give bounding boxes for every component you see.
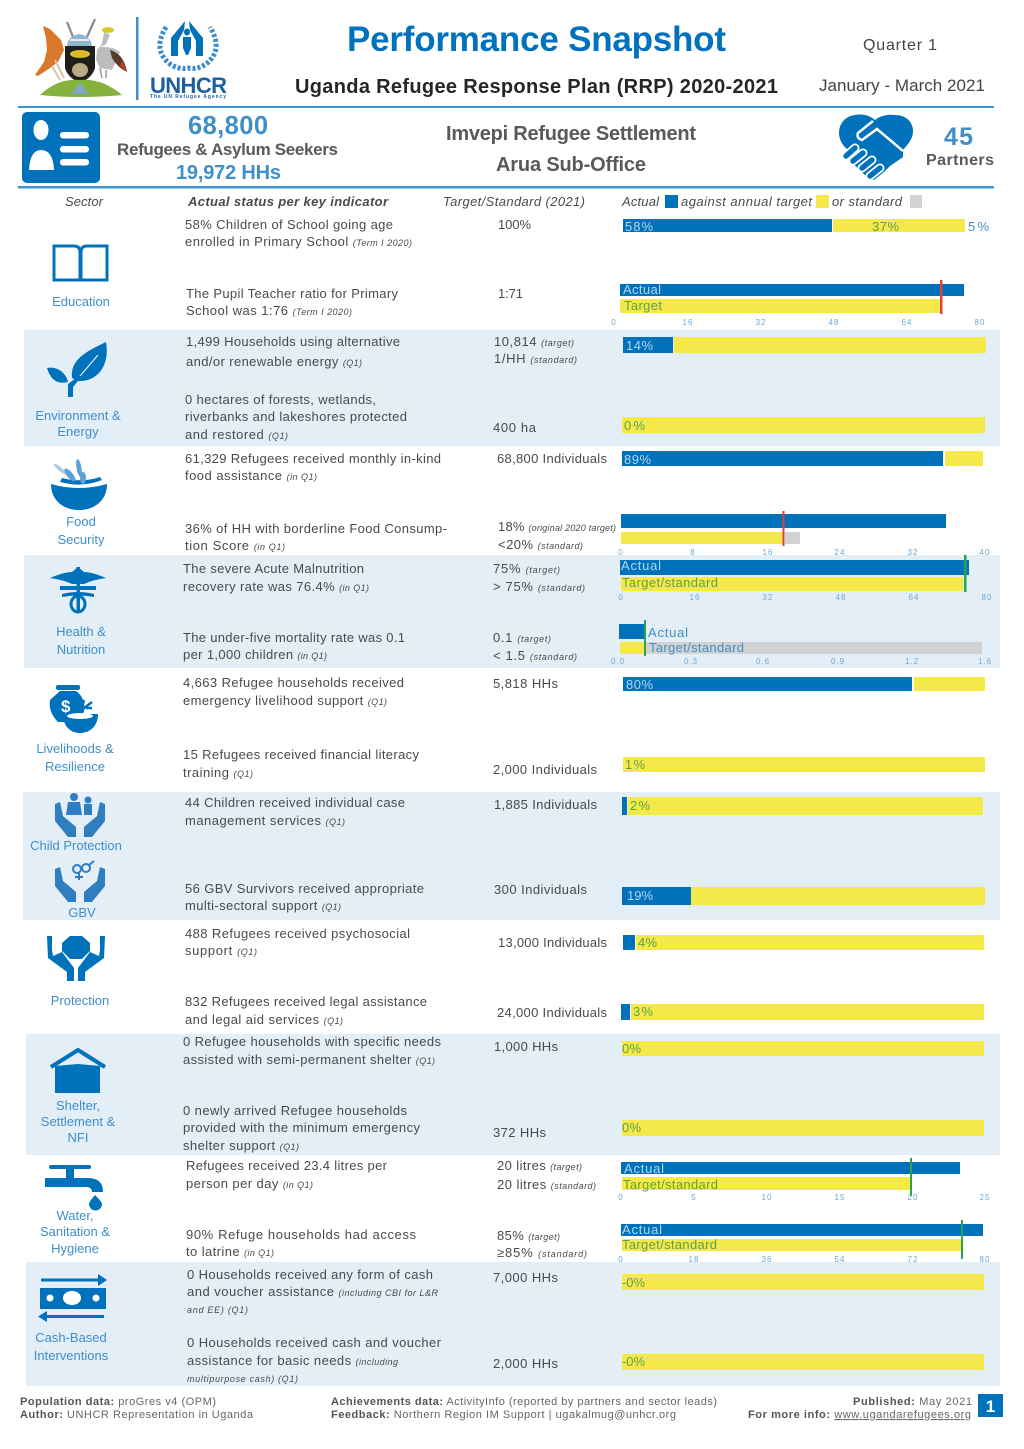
sector label: GBV	[68, 905, 96, 920]
sector label: Education	[52, 294, 110, 309]
indicator: semi-permanent shelter: 1,000 HHs	[494, 1039, 558, 1054]
bar chart: latrine access: 0	[618, 1255, 624, 1264]
bar chart: hectares: 0%	[624, 418, 645, 433]
bar chart: litres per person: 20	[908, 1193, 918, 1202]
page number: 1	[986, 1397, 995, 1416]
bar chart: pupil teacher ratio: 64	[902, 318, 912, 327]
indicator: food assistance: 61,329 Refugees received monthly in-kind	[185, 451, 441, 466]
indicator: psychosocial support: support (Q1)	[185, 943, 257, 958]
bar chart: food consumption: 0	[618, 548, 624, 557]
sector label	[40, 1208, 110, 1256]
footer: data sources: Population data: proGres v4 (OPM)	[20, 1396, 216, 1408]
bar chart: emergency shelter	[622, 1120, 984, 1136]
indicator: financial literacy	[183, 747, 598, 780]
indicator: emergency livelihood: 4,663 Refugee households received	[183, 675, 404, 690]
logo: UNHCR: The UN Refugee Agency	[150, 94, 226, 100]
bar chart: energy: 14%	[626, 338, 653, 353]
indicator: under-five mortality: < 1.5 (standard)	[493, 648, 577, 663]
indicator: semi-permanent shelter: assisted with semi-permanent shelter (Q1)	[183, 1052, 435, 1067]
population stats: 68,800	[188, 112, 268, 140]
indicator: emergency shelter: provided with the minimum emergency	[183, 1120, 420, 1135]
bar chart: food consumption	[618, 511, 990, 557]
sector label	[58, 514, 105, 547]
panel: shelter, settlement and NFI	[26, 1034, 1000, 1155]
indicator: emergency shelter: 0 newly arrived Refugee households	[183, 1103, 408, 1118]
bar chart: mortality	[611, 620, 992, 666]
bar chart: mortality: Target/standard	[649, 640, 744, 655]
indicator: GBV survivors: 300 Individuals	[494, 882, 588, 897]
title: Performance Snapshot	[347, 20, 726, 59]
icon: water tap	[45, 1165, 103, 1210]
bar chart: latrine access	[618, 1220, 990, 1264]
footer: achievements and feedback: Achievements data: ActivityInfo (reported by partners and sector leads)	[331, 1396, 717, 1408]
indicator: latrine access: 90% Refuge households had access	[186, 1227, 416, 1242]
bar chart: latrine access: 54	[835, 1255, 845, 1264]
bar chart: pupil teacher ratio: 32	[756, 318, 766, 327]
indicator: food assistance: 68,800 Individuals	[497, 451, 608, 466]
indicator: pupil teacher ratio: The Pupil Teacher ratio for Primary	[186, 286, 398, 301]
bar chart: enrolment	[623, 219, 989, 234]
bar chart: litres per person: 25	[980, 1193, 990, 1202]
indicator: alternative energy	[186, 334, 577, 369]
indicator: pupil teacher ratio: 1:71	[498, 286, 523, 301]
indicator: children enrolled: enrolled in Primary School (Term I 2020)	[185, 234, 412, 249]
bar chart: emergency livelihood	[623, 677, 985, 692]
sector label: Food	[66, 514, 96, 529]
footer: data sources	[20, 1396, 254, 1421]
indicator: hectares: 0 hectares of forests, wetlands,	[185, 392, 376, 407]
indicator: latrine access: ≥85% (standard)	[497, 1245, 587, 1260]
indicator: legal assistance: 832 Refugees received legal assistance	[185, 994, 427, 1009]
table header and legend: Target/Standard (2021)	[443, 194, 585, 209]
bar chart: cash and voucher assistance	[622, 1274, 984, 1290]
indicator: child case management	[185, 795, 598, 828]
sector label: Nutrition	[57, 642, 105, 657]
indicator: litres per person: Refugees received 23.4 litres per	[186, 1158, 388, 1173]
logo: UNHCR: UNHCR	[150, 73, 227, 98]
icon: money bag and bowl: $	[61, 697, 71, 716]
table header and legend: Actual	[621, 194, 660, 209]
indicator: food consumption: <20% (standard)	[498, 537, 583, 552]
indicator: food consumption: 18% (original 2020 target)	[498, 519, 616, 534]
indicator: litres per person: person per day (in Q1)	[186, 1176, 313, 1191]
indicator: under-five mortality: The under-five mortality rate was 0.1	[183, 630, 405, 645]
bar chart: enrolment: 58%	[625, 219, 653, 234]
bar chart: child case management	[622, 797, 983, 815]
panel: food security	[51, 451, 990, 557]
icon: house	[51, 1050, 105, 1093]
footer: publication: For more info: www.ugandarefugees.org	[748, 1409, 971, 1421]
sector label: Cash-Based	[35, 1330, 107, 1345]
bar chart: mortality: 0.6	[756, 657, 770, 666]
indicator: basic needs: 0 Households received cash and voucher	[187, 1335, 442, 1350]
sector label	[56, 624, 106, 657]
indicator: children enrolled: 58% Children of School going age	[185, 217, 393, 232]
indicator: financial literacy: 2,000 Individuals	[493, 762, 598, 777]
icon: hands and gender symbol	[55, 861, 105, 902]
table header and legend: Actual status per key indicator	[187, 194, 389, 209]
indicator: litres per person	[186, 1158, 596, 1192]
indicator: latrine access: to latrine (in Q1)	[186, 1244, 274, 1259]
partners: Partners	[926, 152, 994, 169]
population stats: 19,972 HHs	[176, 162, 281, 184]
bar chart: emergency livelihood: 80%	[626, 677, 653, 692]
bar chart: basic needs: -0%	[622, 1354, 645, 1369]
bar chart: semi-permanent shelter	[622, 1041, 984, 1056]
bar chart: mortality: 1.2	[905, 657, 919, 666]
logo: UNHCR	[150, 21, 227, 100]
indicator: alternative energy: 10,814 (target)	[494, 334, 574, 349]
indicator: children enrolled	[185, 217, 531, 249]
bar chart: basic needs	[622, 1354, 984, 1370]
panel: water, sanitation and hygiene	[40, 1158, 990, 1264]
sector label	[41, 1098, 116, 1145]
bar chart: malnutrition: 64	[909, 593, 919, 602]
sector label: Settlement &	[41, 1114, 116, 1129]
bar chart: food assistance	[622, 451, 983, 467]
bar chart: semi-permanent shelter: 0%	[622, 1041, 641, 1056]
indicator: food consumption	[185, 519, 616, 553]
page number	[978, 1394, 1003, 1417]
indicator: under-five mortality: 0.1 (target)	[493, 630, 551, 645]
bar chart: pupil teacher ratio: Actual	[623, 282, 661, 297]
indicator: child case management: 44 Children received individual case	[185, 795, 405, 810]
icon: plant	[47, 342, 107, 397]
sector label: Hygiene	[51, 1241, 99, 1256]
footer: data sources: Author: UNHCR Representation in Uganda	[20, 1409, 254, 1421]
indicator: hectares	[185, 392, 537, 442]
indicator: under-five mortality	[183, 630, 577, 663]
indicator: GBV survivors: 56 GBV Survivors received appropriate	[185, 881, 424, 896]
bar chart: litres per person: 5	[691, 1193, 697, 1202]
sector label: Security	[58, 532, 105, 547]
icon: book	[54, 246, 107, 280]
indicator: acute malnutrition: The severe Acute Malnutrition	[183, 561, 364, 576]
bar chart: malnutrition: 48	[836, 593, 846, 602]
bar chart: food assistance: 89%	[624, 452, 651, 467]
sector label: Child Protection	[30, 838, 122, 853]
bar chart: litres per person: 0	[618, 1193, 624, 1202]
indicator: hectares: 400 ha	[493, 420, 537, 435]
bar chart: mortality: 0.3	[684, 657, 698, 666]
bar chart: child case management: 2%	[630, 798, 650, 813]
indicator: alternative energy: 1/HH (standard)	[494, 351, 577, 366]
panel: livelihoods and resilience	[36, 675, 985, 780]
indicator: acute malnutrition: recovery rate was 76.4% (in Q1)	[183, 579, 369, 594]
bar chart: latrine access: 72	[908, 1255, 918, 1264]
footer: achievements and feedback	[331, 1396, 717, 1421]
indicator: hectares: and restored (Q1)	[185, 427, 288, 442]
icon: refugee id card	[22, 112, 100, 183]
bar chart: mortality: 1.6	[978, 657, 992, 666]
icon: bowl with wheat	[51, 459, 107, 510]
sector label: Shelter,	[56, 1098, 100, 1113]
indicator: GBV survivors	[185, 881, 588, 913]
bar chart: psychosocial support	[623, 935, 984, 950]
sector label	[35, 408, 121, 439]
indicator: child case management: 1,885 Individuals	[494, 797, 598, 812]
indicator: financial literacy: 15 Refugees received financial literacy	[183, 747, 420, 762]
bar chart: financial literacy: 1%	[625, 757, 645, 772]
indicator: emergency shelter	[183, 1103, 546, 1153]
indicator: semi-permanent shelter: 0 Refugee households with specific needs	[183, 1034, 442, 1049]
indicator: emergency shelter: shelter support (Q1)	[183, 1138, 299, 1153]
partners	[926, 123, 994, 169]
sector label	[34, 1330, 109, 1363]
indicator: under-five mortality: per 1,000 children (in Q1)	[183, 647, 327, 662]
bar chart: energy	[623, 337, 986, 353]
bar chart: malnutrition: 32	[763, 593, 773, 602]
indicator: acute malnutrition: > 75% (standard)	[493, 579, 585, 594]
bar chart: financial literacy	[623, 757, 985, 772]
footer: achievements and feedback: Feedback: Northern Region IM Support | ugakalmug@unhcr.org	[331, 1409, 676, 1421]
indicator: child case management: management services (Q1)	[185, 813, 345, 828]
panel: environment and energy	[24, 330, 1000, 446]
indicator: legal assistance: 24,000 Individuals	[497, 1005, 608, 1020]
settlement name: Imvepi Refugee Settlement	[446, 123, 696, 145]
bar chart: pupil teacher ratio: 80	[975, 318, 985, 327]
indicator: litres per person: 20 litres (standard)	[497, 1177, 596, 1192]
indicator: cash and voucher assistance	[187, 1267, 558, 1315]
indicator: basic needs: 2,000 HHs	[493, 1356, 558, 1371]
sector label: NFI	[68, 1130, 88, 1145]
bar chart: malnutrition: Target/standard	[622, 575, 718, 590]
sector label: Interventions	[34, 1348, 109, 1363]
bar chart: food consumption: 24	[835, 548, 845, 557]
bar chart: litres per person	[618, 1158, 990, 1202]
icon: banknote with arrows	[38, 1274, 107, 1322]
partners: 45	[944, 123, 973, 151]
footer: publication	[748, 1396, 972, 1421]
indicator: legal assistance	[185, 994, 608, 1027]
indicator: cash and voucher assistance: and EE) (Q1)	[187, 1305, 248, 1315]
indicator: pupil teacher ratio: School was 1:76 (Term I 2020)	[186, 303, 352, 318]
bar chart: cash and voucher assistance: -0%	[622, 1275, 645, 1290]
indicator: basic needs: assistance for basic needs (including	[187, 1353, 398, 1368]
bar chart: latrine access: Actual	[622, 1222, 662, 1237]
bar chart: food consumption: 40	[980, 548, 990, 557]
indicator: basic needs: multipurpose cash) (Q1)	[187, 1374, 298, 1384]
bar chart: hectares	[622, 417, 985, 433]
logo: Uganda coat of arms	[35, 19, 127, 97]
bar chart: litres per person: Target/standard	[623, 1177, 718, 1192]
indicator: psychosocial support	[185, 926, 608, 958]
indicator: alternative energy: and/or renewable energy (Q1)	[186, 354, 362, 369]
bar chart: enrolment: 5%	[968, 219, 989, 234]
indicator: food consumption: 36% of HH with borderline Food Consump-	[185, 521, 447, 536]
bar chart: malnutrition	[618, 555, 992, 602]
bar chart: legal assistance: 3%	[633, 1004, 653, 1019]
panel: education	[52, 217, 989, 327]
bar chart: litres per person: 10	[762, 1193, 772, 1202]
bar chart: pupil teacher ratio: 0	[611, 318, 617, 327]
indicator: latrine access: 85% (target)	[497, 1228, 560, 1243]
bar chart: GBV survivors	[622, 887, 985, 905]
table header and legend	[65, 194, 922, 209]
bar chart: emergency shelter: 0%	[622, 1120, 641, 1135]
bar chart: malnutrition: 0	[618, 593, 624, 602]
icon: caduceus	[50, 567, 106, 613]
quarter: Quarter 1	[863, 37, 937, 54]
table header and legend: or standard	[832, 194, 903, 209]
bar chart: latrine access: 36	[762, 1255, 772, 1264]
indicator: emergency shelter: 372 HHs	[493, 1125, 546, 1140]
bar chart: litres per person: Actual	[624, 1161, 664, 1176]
panel: health and nutrition	[24, 555, 1000, 668]
sector label	[36, 741, 114, 774]
bar chart: food consumption: 32	[908, 548, 918, 557]
sector label: Environment &	[35, 408, 121, 423]
bar chart: food consumption: 16	[763, 548, 773, 557]
panel: cash-based interventions	[26, 1262, 1000, 1386]
population stats	[117, 112, 338, 184]
footer: publication: Published: May 2021	[853, 1396, 972, 1408]
settlement name: Arua Sub-Office	[496, 154, 646, 176]
icon: handshake heart	[839, 115, 913, 180]
subtitle: Uganda Refugee Response Plan (RRP) 2020-2021	[295, 76, 778, 98]
sector label: Water,	[56, 1208, 94, 1223]
indicator: cash and voucher assistance: 0 Households received any form of cash	[187, 1267, 433, 1282]
indicator: hectares: riverbanks and lakeshores protected	[185, 409, 407, 424]
indicator: emergency livelihood: 5,818 HHs	[493, 676, 558, 691]
indicator: acute malnutrition: 75% (target)	[493, 561, 560, 576]
icon: hands and children	[55, 793, 105, 837]
sector label: Health &	[56, 624, 106, 639]
sector label: Energy	[57, 424, 99, 439]
indicator: food assistance	[185, 451, 608, 483]
indicator: cash and voucher assistance: 7,000 HHs	[493, 1270, 558, 1285]
bar chart: latrine access: Target/standard	[622, 1237, 717, 1252]
settlement name	[446, 123, 696, 176]
indicator: food assistance: food assistance (in Q1)	[185, 468, 317, 483]
bar chart: pupil teacher ratio: 16	[683, 318, 693, 327]
sector label: Livelihoods &	[36, 741, 114, 756]
indicator: emergency livelihood: emergency livelihood support (Q1)	[183, 693, 387, 708]
indicator: pupil teacher ratio	[186, 286, 523, 318]
bar chart: mortality: Actual	[648, 625, 688, 640]
bar chart: mortality: 0.0	[611, 657, 625, 666]
indicator: semi-permanent shelter	[183, 1034, 558, 1067]
bar chart: pupil teacher ratio: 48	[829, 318, 839, 327]
bar chart: pupil teacher ratio	[611, 280, 985, 327]
bar chart: mortality: 0.9	[831, 657, 845, 666]
bar chart: legal assistance	[621, 1004, 984, 1020]
bar chart: malnutrition: 80	[982, 593, 992, 602]
indicator: psychosocial support: 488 Refugees received psychosocial	[185, 926, 410, 941]
panel: child protection and GBV	[23, 792, 1000, 920]
indicator: GBV survivors: multi-sectoral support (Q1)	[185, 898, 341, 913]
bar chart: GBV survivors: 19%	[627, 888, 653, 903]
indicator: latrine access	[186, 1227, 587, 1260]
divider: logos	[136, 17, 138, 100]
sector label: Resilience	[45, 759, 105, 774]
table header and legend: against annual target	[681, 194, 813, 209]
bar chart: latrine access: 18	[689, 1255, 699, 1264]
panel: protection	[47, 926, 984, 1027]
bar chart: psychosocial support: 4%	[638, 935, 657, 950]
indicator: legal assistance: and legal aid services (Q1)	[185, 1012, 343, 1027]
bar chart: latrine access: 80	[980, 1255, 990, 1264]
population stats: Refugees & Asylum Seekers	[117, 140, 338, 159]
indicator: basic needs	[187, 1335, 558, 1384]
indicator: food consumption: tion Score (in Q1)	[185, 538, 285, 553]
indicator: children enrolled: 100%	[498, 217, 531, 232]
bar chart: malnutrition: Actual	[621, 558, 661, 573]
bar chart: malnutrition: 16	[690, 593, 700, 602]
indicator: financial literacy: training (Q1)	[183, 765, 253, 780]
indicator: acute malnutrition	[183, 561, 585, 594]
bar chart: litres per person: 15	[835, 1193, 845, 1202]
sector label: Protection	[51, 993, 109, 1008]
indicator: alternative energy: 1,499 Households using alternative	[186, 334, 400, 349]
bar chart: food consumption: 8	[690, 548, 696, 557]
bar chart: enrolment: 37%	[872, 219, 899, 234]
indicator: cash and voucher assistance: and voucher assistance (including CBI for L&R	[187, 1284, 438, 1299]
indicator: litres per person: 20 litres (target)	[497, 1158, 582, 1173]
indicator: emergency livelihood	[183, 675, 558, 708]
icon: hands with protected object	[47, 936, 105, 981]
indicator: psychosocial support: 13,000 Individuals	[498, 935, 608, 950]
bar chart: pupil teacher ratio: Target	[624, 298, 662, 313]
table header and legend: Sector	[65, 194, 104, 209]
icon: money bag and bowl	[50, 685, 98, 733]
period: January - March 2021	[819, 76, 985, 95]
sector label: Sanitation &	[40, 1224, 110, 1239]
